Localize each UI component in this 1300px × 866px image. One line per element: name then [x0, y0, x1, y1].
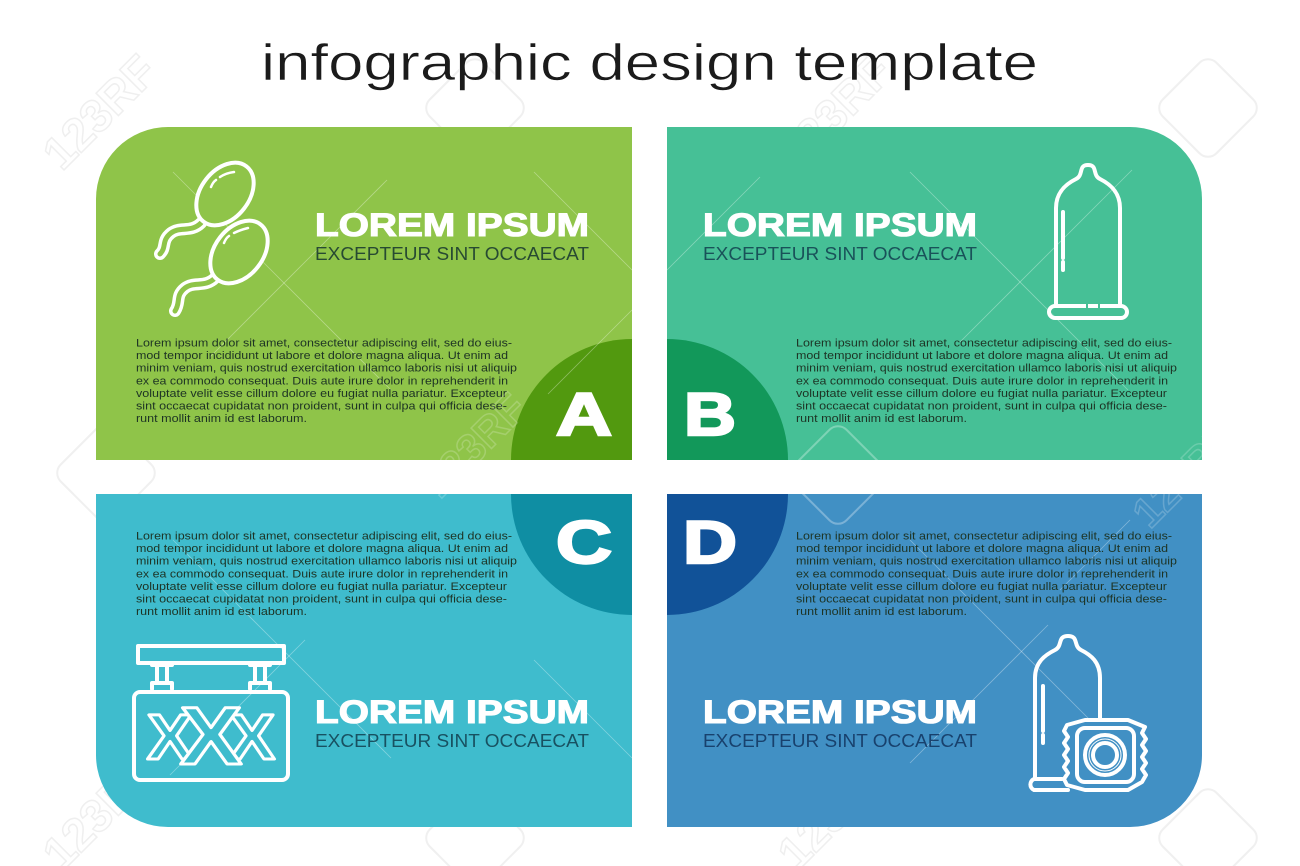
- body text B: voluptate velit esse cillum dolore eu fugiat nulla pariatur. Excepteur: [796, 388, 1167, 400]
- body text D: sint occaecat cupidatat non proident, sunt in culpa qui officia dese-: [796, 594, 1167, 606]
- body text A: Lorem ipsum dolor sit amet, consectetur adipiscing elit, sed do eius-: [136, 338, 512, 350]
- body text C: sint occaecat cupidatat non proident, sunt in culpa qui officia dese-: [136, 594, 507, 606]
- panel: A: [96, 127, 632, 460]
- body text D: runt mollit anim id est laborum.: [796, 606, 967, 618]
- heading B: LOREM IPSUM: [703, 207, 977, 243]
- body text A: mod tempor incididunt ut labore et dolore magna aliqua. Ut enim ad: [136, 350, 508, 362]
- body text B: minim veniam, quis nostrud exercitation ullamco laboris nisi ut aliquip: [796, 363, 1177, 375]
- subheading A: EXCEPTEUR SINT OCCAECAT: [315, 244, 589, 264]
- panel: B: [667, 127, 1202, 460]
- icon: condom: [1049, 165, 1127, 318]
- body text C: Lorem ipsum dolor sit amet, consectetur adipiscing elit, sed do eius-: [136, 530, 512, 542]
- body text A: runt mollit anim id est laborum.: [136, 413, 307, 425]
- watermark lines C: [170, 540, 632, 775]
- body text B: ex ea commodo consequat. Duis aute irure dolor in reprehenderit in: [796, 375, 1168, 387]
- letter D: D: [683, 509, 737, 576]
- body text C: ex ea commodo consequat. Duis aute irure dolor in reprehenderit in: [136, 568, 508, 580]
- body text B: Lorem ipsum dolor sit amet, consectetur adipiscing elit, sed do eius-: [796, 338, 1172, 350]
- body text D: minim veniam, quis nostrud exercitation ullamco laboris nisi ut aliquip: [796, 556, 1177, 568]
- body text C: mod tempor incididunt ut labore et dolore magna aliqua. Ut enim ad: [136, 543, 508, 555]
- panel: D: [667, 494, 1202, 827]
- body text A: sint occaecat cupidatat non proident, sunt in culpa qui officia dese-: [136, 400, 507, 412]
- body text C: runt mollit anim id est laborum.: [136, 606, 307, 618]
- watermarks over panels: [413, 384, 1246, 536]
- body text C: minim veniam, quis nostrud exercitation ullamco laboris nisi ut aliquip: [136, 556, 517, 568]
- letter C: C: [556, 509, 612, 576]
- badge circle D: [667, 494, 788, 615]
- icon: sperm cells: [160, 152, 279, 311]
- title: infographic design template: [261, 34, 1038, 91]
- subheading C: EXCEPTEUR SINT OCCAECAT: [315, 731, 589, 751]
- watermarks over panels: 123RF: [413, 384, 536, 506]
- body text C: voluptate velit esse cillum dolore eu fugiat nulla pariatur. Excepteur: [136, 581, 507, 593]
- letter A: A: [556, 381, 612, 448]
- panel: C: [96, 494, 632, 827]
- body text D: voluptate velit esse cillum dolore eu fugiat nulla pariatur. Excepteur: [796, 581, 1167, 593]
- watermark lines A: [173, 172, 632, 394]
- icon: xxx sign: X: [180, 691, 242, 782]
- letter B: B: [684, 381, 736, 448]
- watermarks over panels: 123RF: [1123, 414, 1246, 536]
- body text D: ex ea commodo consequat. Duis aute irure dolor in reprehenderit in: [796, 568, 1168, 580]
- heading A: LOREM IPSUM: [315, 207, 589, 243]
- badge circle C: [511, 494, 632, 615]
- body text A: voluptate velit esse cillum dolore eu fugiat nulla pariatur. Excepteur: [136, 388, 507, 400]
- badge circle B: [667, 339, 788, 460]
- watermark lines B: [667, 170, 1132, 390]
- body text B: mod tempor incididunt ut labore et dolore magna aliqua. Ut enim ad: [796, 350, 1168, 362]
- icon: condom and package: [1030, 636, 1146, 790]
- body text A: minim veniam, quis nostrud exercitation ullamco laboris nisi ut aliquip: [136, 363, 517, 375]
- icon: xxx sign: X: [229, 701, 275, 773]
- heading D: LOREM IPSUM: [703, 694, 977, 730]
- icon: xxx sign: X: [147, 701, 193, 773]
- watermarks on background: 123RF: [32, 45, 167, 179]
- body text A: ex ea commodo consequat. Duis aute irure dolor in reprehenderit in: [136, 375, 508, 387]
- body text B: runt mollit anim id est laborum.: [796, 413, 967, 425]
- body text D: mod tempor incididunt ut labore et dolore magna aliqua. Ut enim ad: [796, 543, 1168, 555]
- subheading D: EXCEPTEUR SINT OCCAECAT: [703, 731, 977, 751]
- watermark lines D: [910, 520, 1130, 763]
- subheading B: EXCEPTEUR SINT OCCAECAT: [703, 244, 977, 264]
- badge circle A: [511, 339, 632, 460]
- watermarks on background: 123RF: [767, 45, 902, 179]
- icon: xxx sign: [134, 646, 288, 782]
- heading C: LOREM IPSUM: [315, 694, 589, 730]
- body text B: sint occaecat cupidatat non proident, sunt in culpa qui officia dese-: [796, 400, 1167, 412]
- body text D: Lorem ipsum dolor sit amet, consectetur adipiscing elit, sed do eius-: [796, 530, 1172, 542]
